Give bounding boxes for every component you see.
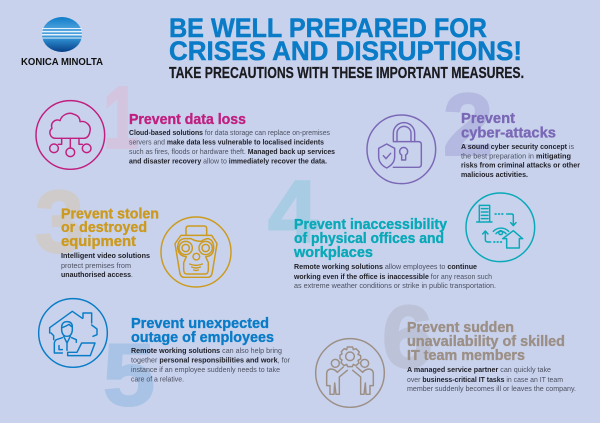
heading [131, 315, 274, 346]
heading [407, 319, 565, 364]
title: CRISES AND DISRUPTIONS! [169, 36, 522, 66]
heading: or destroyed [61, 219, 147, 236]
body text: Intelligent video solutions [61, 251, 150, 260]
body text: over business-critical IT tasks in case an IT team [407, 375, 563, 384]
body text [61, 251, 150, 279]
heading: IT team members [407, 347, 525, 364]
number 6: 6 [382, 287, 433, 386]
number 3: 3 [35, 172, 84, 271]
icon: team with gear [316, 339, 384, 407]
body text: Remote working solutions can also help bring [131, 346, 282, 355]
body text: Remote working solutions allow employees to continue [294, 262, 477, 271]
icon: person working from home [39, 299, 107, 367]
panel: prevent unavailability of IT team [316, 287, 576, 407]
heading: equipment [61, 233, 136, 250]
body text: A sound cyber security concept is [461, 142, 574, 151]
heading [61, 206, 159, 250]
panel: prevent stolen equipment [35, 172, 231, 287]
icon: cloud network [36, 101, 105, 169]
body text: care of a relative. [131, 374, 184, 384]
title [169, 13, 522, 66]
body text: risks from criminal attacks or other [461, 160, 580, 170]
heading: Prevent [461, 110, 515, 127]
heading: workplaces [293, 244, 373, 261]
logo: Konica Minolta: KONICA MINOLTA [21, 57, 103, 68]
logo: Konica Minolta [21, 17, 103, 68]
body text: the best preparation in mitigating [461, 152, 571, 160]
body text: working even if the office is inaccessible for any reason such [293, 272, 492, 281]
body text: and disaster recovery allow to immediately recover the data. [129, 156, 327, 166]
number 5: 5 [103, 325, 155, 423]
body text: as extreme weather conditions or strike in public transportation. [294, 281, 496, 290]
icon: padlock and shield [367, 115, 436, 184]
body text [131, 346, 290, 384]
body text: such as fires, floods or hardware theft. Managed back up services [129, 147, 335, 156]
heading: unavailability of skilled [407, 333, 565, 350]
number 1: 1 [103, 68, 139, 167]
heading: Prevent data loss [129, 111, 246, 128]
number 2: 2 [443, 75, 493, 174]
body text: unauthorised access. [61, 270, 133, 279]
heading: Prevent inaccessibility [294, 216, 448, 233]
heading [293, 216, 448, 261]
heading: Prevent unexpected [131, 315, 269, 332]
icon: office and home connectivity [466, 193, 535, 262]
body text: A managed service partner can quickly take [407, 365, 551, 374]
body text: malicious activities. [461, 170, 528, 179]
body text [461, 142, 580, 179]
panel: prevent data loss [36, 68, 335, 169]
icon: video camera [161, 217, 231, 287]
heading: of physical offices and [294, 230, 444, 247]
body text: member suddenly becomes ill or leaves the company. [407, 384, 576, 393]
body text: protect premises from [61, 261, 131, 270]
title: BE WELL PREPARED FOR [169, 13, 487, 43]
number 4: 4 [268, 162, 318, 261]
body text: Cloud-based solutions for data storage can replace on-premises [129, 128, 330, 137]
panel: prevent inaccessibility [268, 162, 535, 290]
heading: Prevent stolen [61, 206, 159, 222]
body text: together personal responsibilities and work, for [131, 356, 290, 364]
body text [293, 262, 496, 290]
body text [129, 128, 335, 166]
heading [461, 110, 556, 142]
body text: instance if an employee suddenly needs to take [131, 365, 280, 374]
body text: servers and make data less vulnerable to localised incidents [129, 138, 324, 146]
heading: cyber-attacks [461, 124, 556, 142]
body text [407, 365, 576, 393]
panel: prevent outage of employees [39, 299, 290, 423]
panel: prevent cyber-attacks [367, 75, 580, 184]
heading: Prevent sudden [407, 319, 514, 336]
heading: outage of employees [131, 329, 274, 346]
